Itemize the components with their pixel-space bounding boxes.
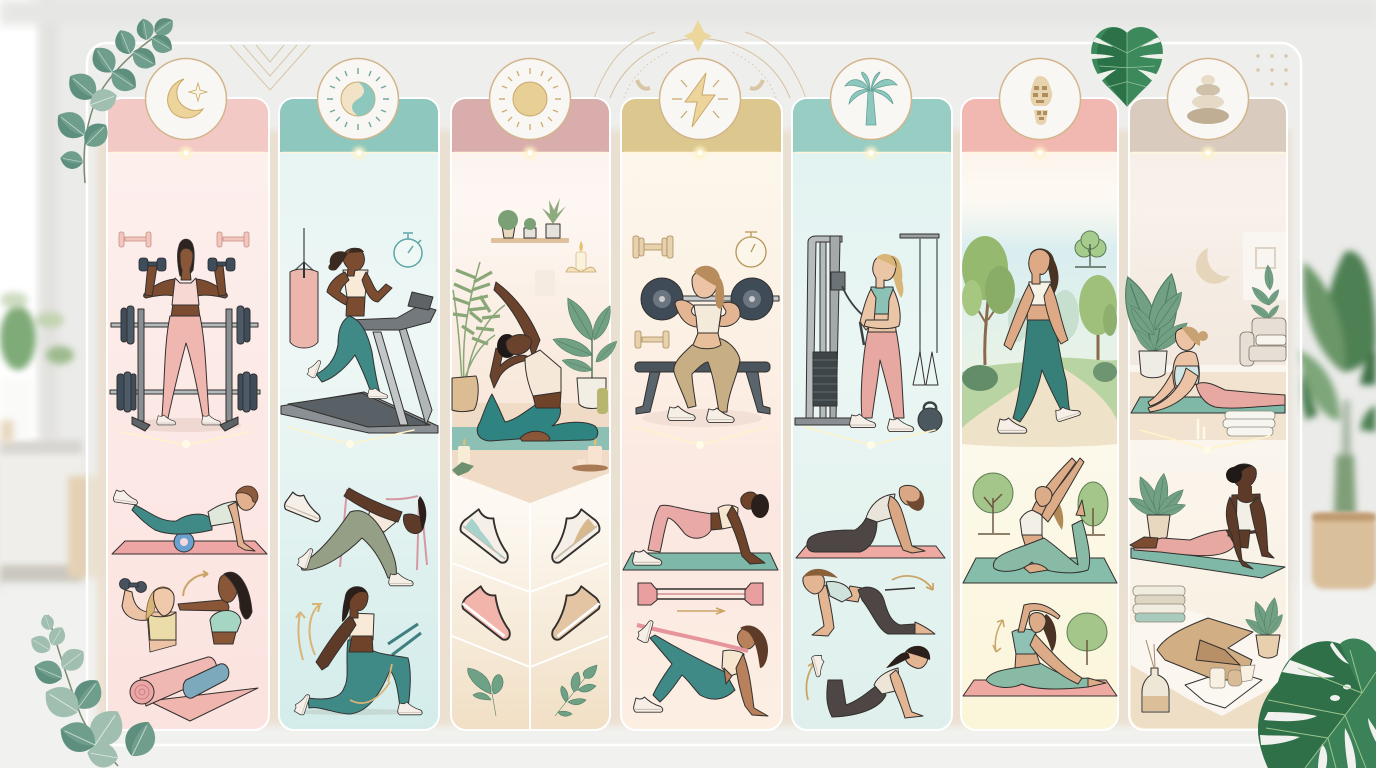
sneaker 2	[538, 505, 602, 565]
barbell	[641, 278, 779, 320]
towels	[1223, 411, 1275, 436]
panel 2: shoe and band stretch	[283, 488, 427, 586]
panel 3 main scene: yoga room	[452, 198, 620, 503]
panel 7: towels, bag, bottle and plant	[1131, 586, 1286, 728]
right small plant	[1249, 265, 1281, 321]
plant in pot	[1243, 597, 1286, 658]
panel 1 divider	[122, 432, 250, 448]
header band	[622, 99, 781, 152]
icon: stacked stones	[1168, 58, 1248, 140]
glow dot	[1202, 147, 1214, 159]
panel 4 main: barbell squat on bench	[633, 232, 779, 427]
palm plant	[453, 262, 505, 382]
cable tower	[795, 236, 866, 425]
panel 4: gold	[621, 98, 782, 730]
panel 4: resistance band and seated leg press	[634, 583, 768, 716]
folded towels	[1133, 586, 1185, 622]
panel 3 shoe and leaf grid	[452, 505, 608, 729]
icon: sun	[490, 58, 570, 140]
woven basket	[452, 376, 478, 412]
panel 7: potted plant and cobra pose	[1126, 464, 1285, 578]
leaf sprig 2	[555, 665, 597, 716]
glow dot	[865, 147, 877, 159]
panel 6: seated twist with tree	[963, 603, 1117, 696]
panel 6 main: walking in park	[962, 200, 1117, 447]
glow dot	[524, 147, 536, 159]
bottle with reeds	[1142, 640, 1169, 712]
tree right	[1078, 482, 1108, 535]
header band	[280, 99, 438, 152]
stopwatch	[736, 232, 766, 267]
cream shelf surfaces	[1131, 608, 1286, 720]
panel 5 divider	[805, 427, 935, 449]
panel 5 main: cable machine	[795, 234, 942, 432]
panel 1: shoulder exercises, blonde and dark-haired women	[120, 571, 252, 652]
panel 5: kneeling back arch on mat	[796, 485, 945, 558]
panel 4 divider	[636, 427, 766, 449]
header band	[793, 99, 951, 152]
panel 7 main: cobra pose at home	[1116, 210, 1286, 440]
panel 7 divider	[1140, 420, 1270, 454]
white cloth	[1185, 670, 1262, 708]
glow dot	[180, 147, 192, 159]
glow dot	[1034, 147, 1046, 159]
eucalyptus branch bottom left	[27, 613, 162, 768]
panel 5: aqua	[792, 98, 952, 730]
panel 7: taupe	[1129, 98, 1287, 730]
header band	[962, 99, 1117, 152]
header band	[452, 99, 609, 152]
candle	[566, 241, 596, 272]
paper bag	[1157, 618, 1253, 680]
walking woman	[1030, 248, 1058, 294]
floor candles	[452, 438, 608, 476]
treadmill	[281, 292, 438, 433]
tan dumbbells	[633, 236, 673, 348]
monstera leaf top right	[1087, 27, 1167, 107]
tree left	[973, 473, 1013, 534]
sneaker 3	[460, 582, 524, 642]
panel 6: seated stretch between trees	[963, 458, 1117, 583]
squatting woman	[674, 338, 740, 412]
panel 1: rolled yoga mat and foam roller	[130, 657, 258, 721]
sneaker 1	[458, 505, 522, 565]
right cable station	[900, 234, 939, 385]
icon: footprints	[1000, 58, 1080, 140]
right plant	[551, 294, 620, 414]
panel 2 main: runner on treadmill with punching bag	[281, 228, 438, 433]
blurred plant right	[1298, 251, 1376, 515]
panel 2 divider	[288, 427, 414, 448]
icon: moon and star	[146, 58, 226, 140]
woman	[1196, 383, 1285, 408]
wall shelf with plants	[491, 198, 569, 243]
moon	[1196, 248, 1230, 284]
tree icon	[1075, 231, 1106, 267]
decorative top ornaments	[230, 20, 1288, 98]
panel 1: back extension on foam roller	[112, 486, 267, 554]
panel 5: cobra with foot raised	[806, 646, 930, 718]
leaf sprig 1	[468, 668, 503, 716]
tall plant	[1116, 271, 1192, 378]
trees	[962, 236, 1117, 370]
glow dot	[694, 147, 706, 159]
sneaker 4	[538, 582, 602, 642]
mat	[1131, 397, 1285, 413]
panel 3: rose	[451, 98, 610, 730]
sofa	[1240, 318, 1286, 366]
icon: palm tree	[830, 58, 912, 140]
panel 5: cat pose	[803, 569, 935, 636]
woman	[886, 256, 903, 298]
weight bench	[635, 362, 770, 414]
jars	[1210, 665, 1255, 688]
pink dumbbells	[119, 232, 249, 247]
stopwatch	[394, 233, 422, 267]
mat	[963, 558, 1117, 583]
header band	[1130, 99, 1286, 152]
kettlebell	[918, 402, 942, 432]
park ground and path	[962, 358, 1117, 432]
monstera leaf bottom right	[1258, 638, 1376, 768]
blurred plant left	[0, 292, 74, 442]
panel 4: reverse tabletop on mat	[623, 492, 778, 570]
panel 2: lunge with arrows and bands	[293, 587, 422, 716]
glow dot	[353, 147, 365, 159]
panel 6: coral	[961, 98, 1118, 730]
left cabinet	[0, 452, 82, 580]
panel 1: pink	[107, 98, 269, 730]
woman	[178, 239, 194, 276]
punching bag	[290, 228, 318, 348]
yoga woman	[477, 394, 598, 441]
barbell rack	[110, 306, 260, 432]
eucalyptus branch top left	[51, 13, 177, 183]
woman	[1046, 490, 1063, 530]
panel 1 main: standing woman with dumbbells and barbell rack	[110, 232, 260, 432]
icon: yin yang sun	[318, 58, 398, 140]
icon: lightning	[660, 58, 740, 140]
header band	[108, 99, 268, 152]
panel 2: teal	[279, 98, 439, 730]
runner	[316, 316, 380, 396]
